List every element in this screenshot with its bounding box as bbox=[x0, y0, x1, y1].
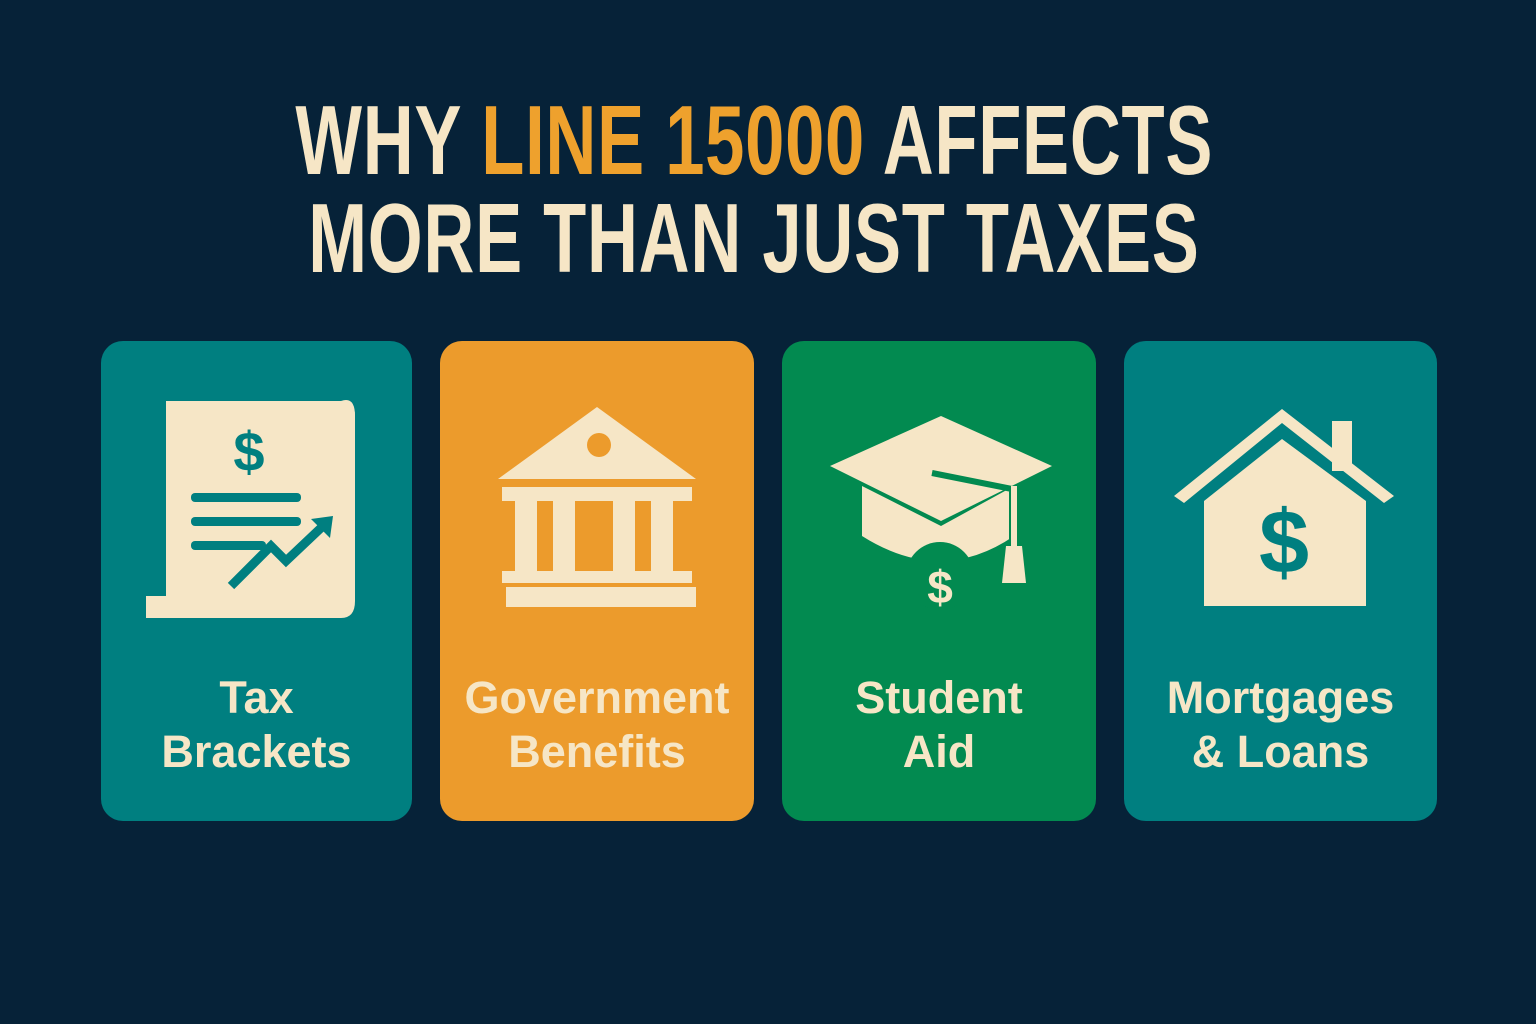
icon: graduation cap bbox=[830, 416, 1052, 613]
label: Tax bbox=[219, 672, 294, 723]
icon: house with dollar: $ bbox=[1259, 493, 1309, 593]
title bbox=[295, 85, 1213, 293]
panel: student aid bbox=[782, 341, 1096, 821]
panel: mortgages and loans bbox=[1124, 341, 1437, 821]
text: WHY LINE 15000 AFFECTS bbox=[295, 85, 1213, 195]
label: Mortgages bbox=[1167, 672, 1394, 723]
icon: government building bbox=[498, 407, 696, 607]
panel: government benefits bbox=[440, 341, 754, 821]
icon: graduation cap: $ bbox=[927, 561, 953, 613]
label bbox=[464, 672, 730, 777]
label: & Loans bbox=[1192, 726, 1369, 777]
icon: house with dollar bbox=[1174, 409, 1394, 606]
label: Student bbox=[855, 672, 1023, 723]
panel: tax brackets bbox=[101, 341, 412, 821]
label: Benefits bbox=[508, 726, 686, 777]
icon: tax document bbox=[146, 400, 355, 618]
text: MORE THAN JUST TAXES bbox=[308, 183, 1200, 293]
label: Aid bbox=[903, 726, 975, 777]
icon: tax document: $ bbox=[233, 420, 265, 483]
label bbox=[855, 672, 1023, 777]
label bbox=[1167, 672, 1394, 777]
label: Government bbox=[464, 672, 730, 723]
label bbox=[161, 672, 352, 777]
label: Brackets bbox=[161, 726, 352, 777]
